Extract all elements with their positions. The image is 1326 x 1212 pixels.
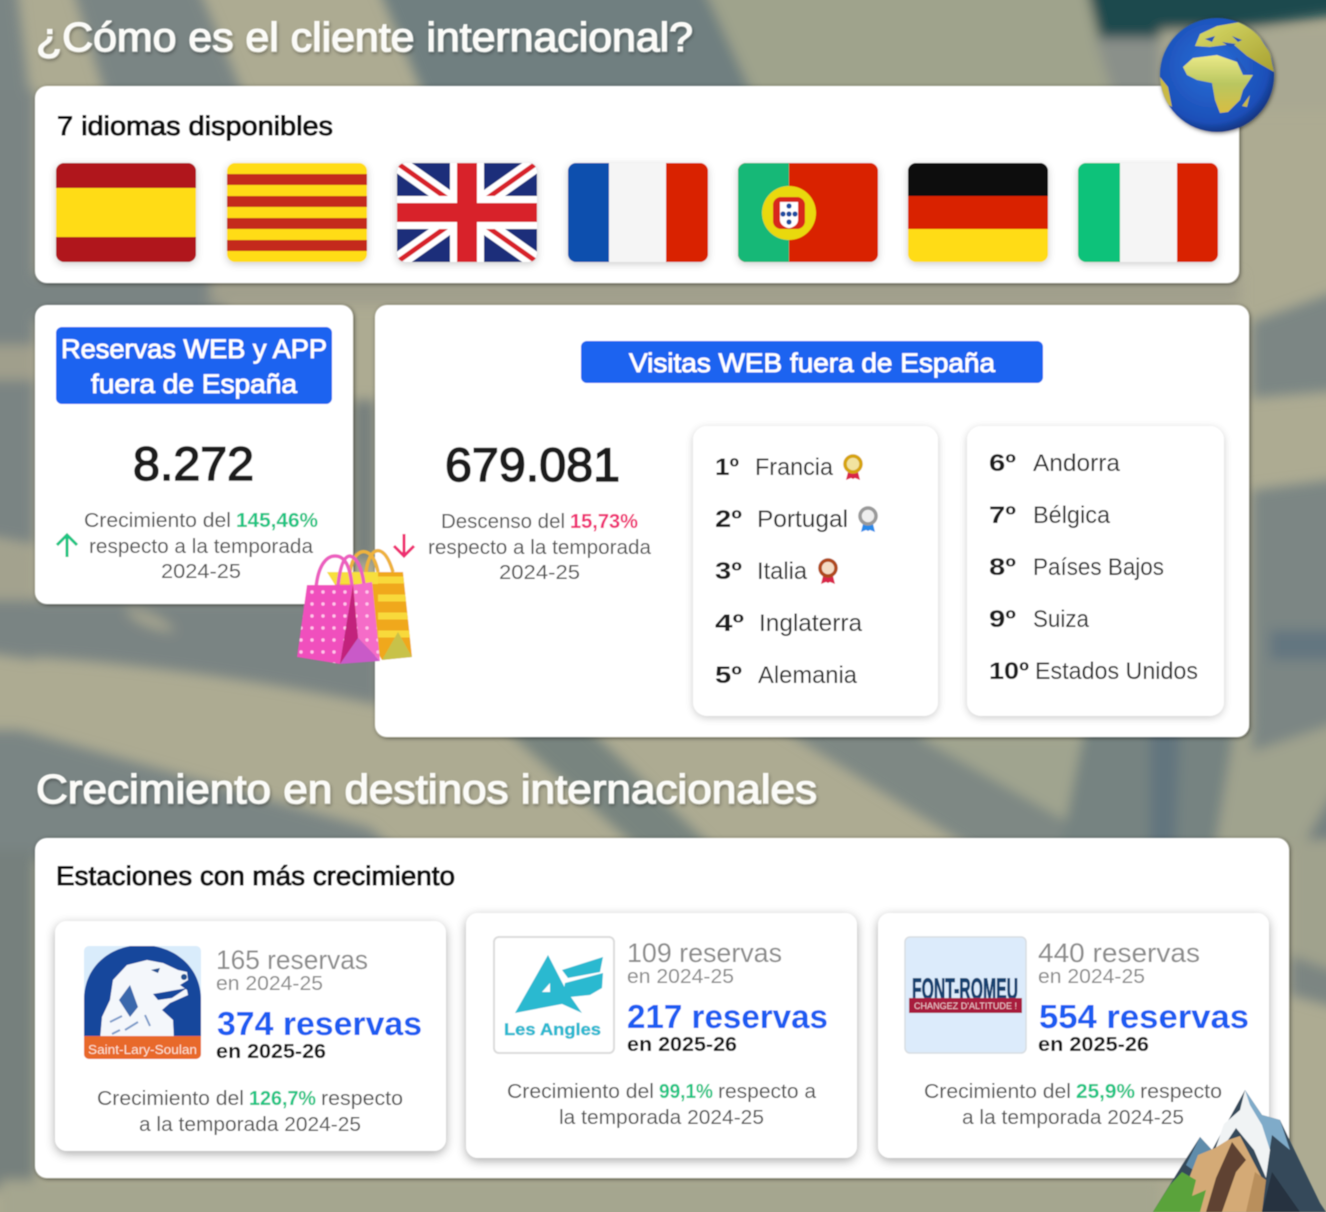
- panel: languages: [35, 86, 1239, 283]
- panel: resorts with most growth: [35, 838, 1289, 1178]
- card: Les Angles: 99,1%: [659, 1081, 713, 1103]
- text: bookings growth: 145,46%: [236, 510, 318, 532]
- list: countries 6 to 10: Andorra: [1033, 450, 1121, 477]
- list: countries 1 to 5: 5º: [715, 662, 742, 689]
- card: Saint-Lary-Soulan: [55, 921, 446, 1151]
- card: Font-Romeu: en 2024-25: [1038, 966, 1145, 988]
- logo: Les Angles: Les Angles: [504, 1020, 601, 1039]
- logo: Les Angles: [494, 937, 614, 1053]
- text: visits decline: 15,73%: [570, 511, 638, 533]
- list: countries 1 to 5: 4º: [715, 610, 744, 637]
- number: 679.081 visits: 679.081: [445, 438, 620, 491]
- badge: bookings heading: [56, 327, 332, 404]
- number: 8.272 bookings: 8.272: [133, 437, 254, 490]
- text: visits decline: [428, 511, 652, 584]
- card: Font-Romeu: 554 reservas: [1039, 998, 1249, 1035]
- card: Les Angles: la temporada 2024-25: [559, 1107, 764, 1129]
- flag: United Kingdom: [397, 163, 537, 262]
- flag: France: [568, 163, 708, 262]
- icon: mountain: [1153, 1090, 1326, 1212]
- list: countries 6 to 10: [967, 426, 1224, 716]
- list: countries 6 to 10: 9º: [989, 606, 1016, 633]
- card: Font-Romeu: respecto: [1140, 1081, 1222, 1103]
- icon: gold medal: [845, 456, 861, 480]
- card: Les Angles: 109 reservas: [627, 938, 782, 968]
- card: Saint-Lary-Soulan: 165 reservas: [216, 945, 368, 975]
- icon: bronze medal: [820, 560, 836, 584]
- text: visits decline: 2024-25: [499, 562, 580, 584]
- text: visits decline: respecto a la temporada: [428, 537, 652, 559]
- list: countries 1 to 5: 3º: [715, 558, 742, 585]
- heading: 7 languages: 7 idiomas disponibles: [57, 111, 333, 141]
- logo: Font-Romeu: FONT-ROMEU: [912, 973, 1018, 1006]
- flag: Italy: [1078, 163, 1218, 262]
- text: visits decline: Descenso del: [441, 511, 565, 533]
- text: bookings growth: [84, 510, 318, 583]
- icon: silver medal: [860, 508, 876, 532]
- card: Font-Romeu: Crecimiento del: [924, 1081, 1071, 1103]
- flag: Catalonia: [227, 163, 367, 262]
- badge: visits heading: [581, 341, 1043, 383]
- flag: Portugal: [738, 163, 878, 262]
- list: countries 1 to 5: Alemania: [758, 662, 858, 689]
- icon: globe: [1160, 18, 1274, 132]
- card: Font-Romeu: en 2025-26: [1038, 1034, 1149, 1056]
- list: countries 6 to 10: Bélgica: [1033, 502, 1111, 529]
- card: Saint-Lary-Soulan: 374 reservas: [217, 1005, 422, 1042]
- card: Les Angles: Crecimiento del: [507, 1081, 654, 1103]
- logo: Saint-Lary-Soulan: [84, 945, 201, 1059]
- card: Font-Romeu: 25,9%: [1076, 1081, 1135, 1103]
- card: Les Angles: 217 reservas: [627, 998, 828, 1035]
- card: Saint-Lary-Soulan: en 2024-25: [216, 973, 323, 995]
- icon: green up arrow: [57, 535, 77, 557]
- list: countries 6 to 10: 6º: [989, 450, 1016, 477]
- panel: web visits: [375, 305, 1249, 737]
- card: Les Angles: en 2024-25: [627, 966, 734, 988]
- card: Saint-Lary-Soulan: Crecimiento del: [97, 1088, 244, 1110]
- text: bookings growth: 2024-25: [161, 561, 241, 583]
- list: countries 1 to 5: 2º: [715, 506, 742, 533]
- card: Font-Romeu: a la temporada 2024-25: [962, 1107, 1184, 1129]
- flag: Spain: [56, 163, 196, 262]
- heading: resorts with most growth: Estaciones con más crecimiento: [56, 861, 455, 891]
- card: Saint-Lary-Soulan: a la temporada 2024-25: [139, 1114, 361, 1136]
- list: countries 1 to 5: Italia: [757, 558, 808, 585]
- list: countries 6 to 10: 8º: [989, 554, 1016, 581]
- logo: Saint-Lary-Soulan: Saint-Lary-Soulan: [88, 1042, 197, 1057]
- card: Saint-Lary-Soulan: 126,7%: [249, 1088, 316, 1110]
- card: Saint-Lary-Soulan: en 2025-26: [216, 1041, 326, 1063]
- title: how is the international customer: ¿Cómo es el cliente internacional?: [36, 14, 693, 60]
- text: bookings growth: Crecimiento del: [84, 510, 231, 532]
- icon: pink down arrow: [394, 534, 414, 556]
- logo: Font-Romeu: CHANGEZ D'ALTITUDE !: [914, 1001, 1017, 1011]
- icon: shopping bags: [297, 551, 412, 664]
- badge: visits heading: Visitas WEB fuera de España: [629, 348, 996, 378]
- list: countries 6 to 10: Suiza: [1033, 606, 1090, 633]
- list: countries 1 to 5: Inglaterra: [759, 610, 863, 637]
- card: Font-Romeu: 440 reservas: [1038, 938, 1200, 968]
- list: countries 1 to 5: [693, 426, 938, 716]
- list: countries 6 to 10: 7º: [989, 502, 1016, 529]
- list: countries 6 to 10: Países Bajos: [1033, 554, 1164, 581]
- list: countries 1 to 5: Portugal: [757, 506, 848, 533]
- card: Les Angles: en 2025-26: [627, 1034, 737, 1056]
- list: countries 1 to 5: Francia: [755, 454, 834, 481]
- badge: bookings heading: fuera de España: [91, 369, 298, 399]
- flag: Germany: [908, 163, 1048, 262]
- list: countries 6 to 10: 10º: [989, 658, 1029, 685]
- card: Font-Romeu: [878, 913, 1269, 1158]
- panel: web and app bookings: [35, 305, 353, 604]
- card: Les Angles: [466, 913, 857, 1158]
- text: bookings growth: respecto a la temporada: [89, 536, 314, 558]
- list: countries 6 to 10: Estados Unidos: [1035, 658, 1198, 685]
- card: Les Angles: respecto a: [718, 1081, 817, 1103]
- list: countries 1 to 5: 1º: [715, 454, 739, 481]
- logo: Font-Romeu: [905, 937, 1026, 1053]
- badge: bookings heading: Reservas WEB y APP: [61, 334, 327, 364]
- title: growth in international destinations: Crecimiento en destinos internacionales: [36, 766, 817, 812]
- card: Saint-Lary-Soulan: respecto: [321, 1088, 403, 1110]
